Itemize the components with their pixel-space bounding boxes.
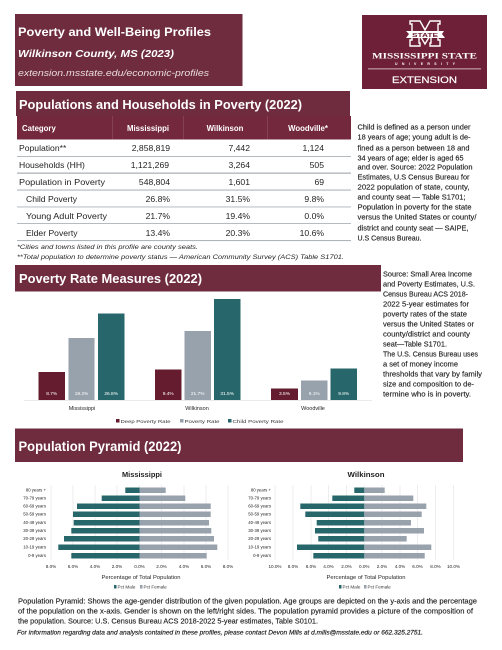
- heading: populations and households: [16, 91, 350, 116]
- county subtitle: Wilkinson County, MS (2023): [18, 48, 175, 60]
- axis ticks: 0.0%: [134, 564, 145, 569]
- axis ticks: 2.0%: [156, 564, 167, 569]
- group: Wilkinson: 9.4%: [163, 391, 174, 397]
- age labels: [23, 488, 46, 558]
- contact line: For information regarding data and analysis contained in these profiles, please contact Devon Mills at d.mills@msstate.edu or 662.325.2751.: [17, 630, 423, 636]
- legend: Pct Female: [368, 584, 391, 590]
- title: Poverty and Well-Being Profiles: [18, 25, 211, 39]
- row: population in poverty: 1,601: [228, 177, 250, 187]
- row: population: Population**: [19, 143, 67, 153]
- axis ticks: 8.0%: [288, 564, 298, 569]
- sidebar note: definitions: Estimates, U.S Census Bureau for: [358, 172, 470, 182]
- logo: Mississippi State University Extension: UNIVERSITY: [395, 62, 456, 66]
- heading: poverty rate measures: Poverty Rate Measures (2022): [19, 271, 202, 286]
- legend: Pct Male: [118, 584, 136, 590]
- age labels: 70-79 years: [23, 496, 46, 500]
- group: Woodville: 3.5%: [279, 391, 291, 397]
- group: Mississippi: 26.8%: [104, 391, 119, 397]
- group: Woodville: 9.8%: [338, 391, 350, 397]
- row: population: 7,442: [228, 143, 250, 153]
- row: child poverty: 9.8%: [304, 194, 324, 204]
- logo: Mississippi State University Extension: EXTENSION: [392, 75, 457, 86]
- male bars: [297, 488, 364, 558]
- sidebar note: poverty sources: Source: Small Area Income: [383, 270, 472, 278]
- heading: poverty rate measures: [15, 265, 381, 292]
- group: Wilkinson: 21.7%: [191, 391, 205, 397]
- bar chart: poverty rate measures: [24, 299, 372, 424]
- table header: [17, 116, 351, 140]
- table header: Mississippi: [127, 124, 169, 133]
- chart: Wilkinson pyramid: Percentage of Total Population: [326, 575, 406, 581]
- row: households: [19, 160, 324, 170]
- row: population: [19, 143, 324, 153]
- axis ticks: 2.0%: [112, 564, 122, 569]
- table footnotes: [17, 244, 344, 261]
- axis ticks: 4.0%: [323, 564, 334, 569]
- axis ticks: 6.0%: [306, 564, 316, 569]
- group: Mississippi: [38, 314, 124, 412]
- table header: Woodville*: [288, 124, 329, 133]
- group: Wilkinson: [155, 299, 240, 412]
- chart: Wilkinson pyramid: [248, 470, 460, 590]
- pyramid description: Population Pyramid: Shows the age-gender distribution of the given population. Age groups are depicted on the y-axis and the percentage: [18, 596, 477, 606]
- age labels: 30-39 years: [248, 528, 271, 533]
- sidebar note: poverty sources: Census Bureau ACS 2018-: [383, 290, 468, 298]
- legend: Deep Poverty Rate: [120, 419, 171, 424]
- sidebar note: definitions: Population in poverty for the state: [358, 202, 472, 212]
- axis ticks: 4.0%: [179, 564, 189, 569]
- age labels: 20-29 years: [23, 536, 46, 541]
- pyramid description: of the population on the x-axis. Gender is shown on the left/right sides. The population pyramid provides a picture of the composition of: [18, 606, 474, 616]
- heading: population pyramid: Population Pyramid (2022): [18, 439, 182, 454]
- age labels: 50-59 years: [23, 512, 46, 516]
- axis ticks: 2.0%: [377, 564, 387, 569]
- pyramid description: the population. Source: U.S. Census Bureau ACS 2018-2022 5-year estimates, Table S0101.: [18, 616, 318, 626]
- sidebar note: poverty sources: thresholds that vary by family: [383, 370, 482, 378]
- row: child poverty: 31.5%: [226, 194, 250, 204]
- axis ticks: 8.0%: [46, 564, 56, 569]
- axis ticks: 6.0%: [68, 564, 78, 569]
- table: populations and households: [17, 116, 351, 241]
- legend: Poverty Rate: [184, 419, 220, 424]
- icon: block M: [410, 21, 440, 46]
- age labels: 30-39 years: [23, 528, 46, 533]
- row: population: 1,124: [302, 143, 324, 153]
- sidebar note: poverty sources: county/district and county: [383, 330, 470, 338]
- row: population in poverty: Population in Poverty: [19, 177, 106, 187]
- sidebar note: poverty sources: termine who is in poverty.: [383, 390, 471, 398]
- age labels: 60-69 years: [248, 504, 271, 508]
- row: child poverty: 26.8%: [146, 194, 170, 204]
- axis ticks: [46, 564, 233, 569]
- chart: Mississippi pyramid: Mississippi: [122, 470, 162, 479]
- row: elder poverty: 13.4%: [146, 228, 170, 238]
- age labels: 20-29 years: [248, 536, 271, 541]
- legend: Child Poverty Rate: [232, 419, 284, 424]
- legend: [114, 584, 167, 590]
- axis ticks: 4.0%: [395, 564, 405, 569]
- row: young adult poverty: 21.7%: [146, 211, 170, 221]
- axis ticks: 4.0%: [90, 564, 100, 569]
- legend: [339, 584, 391, 590]
- website: extension.msstate.edu/economic-profiles: [18, 68, 209, 79]
- sidebar note: poverty sources: a set of money income: [383, 360, 458, 368]
- logo: Mississippi State University Extension: [362, 15, 487, 89]
- axis ticks: 2.0%: [341, 564, 352, 569]
- axis ticks: 8.0%: [223, 564, 233, 569]
- heading: populations and households: Populations and Households in Poverty (2022): [19, 97, 302, 112]
- row: elder poverty: 20.3%: [226, 228, 250, 238]
- sidebar note: poverty sources: 2022 5-year estimates for: [383, 300, 469, 308]
- axis ticks: [268, 564, 460, 569]
- legend: Pct Male: [342, 584, 361, 590]
- age labels: 40-49 years: [23, 520, 46, 525]
- sidebar note: definitions: fined as a person between 18 and: [358, 144, 470, 152]
- row: elder poverty: 10.6%: [300, 228, 324, 238]
- legend: Pct Female: [144, 584, 167, 590]
- logo: Mississippi State University Extension: MISSISSIPPI STATE: [372, 50, 477, 60]
- sidebar note: poverty sources: size and composition to de-: [383, 380, 474, 388]
- sidebar note: poverty sources: and Poverty Estimates, U.S.: [383, 280, 475, 288]
- row: young adult poverty: Young Adult Poverty: [26, 211, 108, 221]
- age labels: 60-69 years: [23, 504, 46, 508]
- group: Woodville: [271, 368, 357, 412]
- row: young adult poverty: 19.4%: [226, 211, 250, 221]
- age labels: 0-9 years: [28, 553, 46, 558]
- age labels: 80 years +: [26, 488, 46, 492]
- pyramid description: [18, 596, 477, 626]
- table footnotes: **Total population to determine poverty status — American Community Survey (ACS) Table S1701.: [17, 254, 344, 261]
- group: Wilkinson: 31.5%: [220, 391, 235, 397]
- header panel: [15, 14, 242, 86]
- axis ticks: 10.0%: [447, 564, 460, 569]
- row: child poverty: Child Poverty: [26, 194, 78, 204]
- sidebar note: poverty sources: seat—Table S1701.: [383, 340, 447, 348]
- axis ticks: 0.0%: [359, 564, 370, 569]
- row: elder poverty: [26, 228, 324, 238]
- row: young adult poverty: [26, 211, 324, 221]
- sidebar note: definitions: and county seat — Table S1701;: [358, 192, 466, 202]
- sidebar note: definitions: 34 years of age; elder is aged 65: [358, 154, 464, 162]
- group: Mississippi: 8.7%: [46, 391, 58, 397]
- sidebar note: poverty sources: The U.S. Census Bureau uses: [383, 350, 478, 358]
- sidebar note: poverty sources: [383, 270, 482, 398]
- sidebar note: definitions: U.S Census Bureau.: [358, 234, 422, 242]
- female bars: [140, 488, 217, 558]
- row: population in poverty: 69: [314, 177, 324, 187]
- age labels: 80 years +: [251, 488, 271, 492]
- row: child poverty: [26, 194, 324, 204]
- axis ticks: 10.0%: [268, 564, 282, 569]
- male bars: [58, 488, 139, 558]
- group: Woodville: 6.1%: [309, 391, 320, 397]
- age labels: 40-49 years: [248, 520, 271, 525]
- sidebar note: definitions: [358, 122, 477, 242]
- table footnotes: *Cities and towns listed in this profile are county seats.: [17, 244, 198, 251]
- axis ticks: 6.0%: [412, 564, 423, 569]
- row: households: 505: [310, 160, 324, 170]
- sidebar note: definitions: versus the United States or county/: [358, 212, 477, 222]
- sidebar note: definitions: Child is defined as a person under: [358, 122, 471, 132]
- group: Mississippi: 19.2%: [75, 391, 89, 397]
- group: Mississippi: Mississippi: [69, 406, 95, 412]
- group: Wilkinson: Wilkinson: [185, 406, 209, 412]
- age labels: 70-79 years: [248, 496, 271, 500]
- age labels: 10-19 years: [23, 544, 46, 550]
- sidebar note: definitions: 18 years of age; young adult is de-: [358, 132, 471, 142]
- icon: state banner: STATE: [412, 33, 438, 39]
- table header: Category: [22, 124, 56, 133]
- sidebar note: poverty sources: poverty rates of the state: [383, 310, 467, 318]
- legend: [116, 419, 284, 424]
- sidebar note: definitions: district and county seat — SAIPE,: [358, 224, 468, 232]
- row: young adult poverty: 0.0%: [304, 211, 324, 221]
- row: households: Households (HH): [19, 160, 85, 170]
- sidebar note: definitions: 2022 population of state, county,: [358, 182, 470, 192]
- row: population in poverty: 548,804: [139, 177, 170, 187]
- axis ticks: 8.0%: [430, 564, 441, 569]
- table header: Wilkinson: [207, 124, 244, 133]
- heading: population pyramid: [15, 428, 463, 462]
- row: households: 1,121,269: [131, 160, 169, 170]
- row: population in poverty: [19, 177, 324, 187]
- chart: Mississippi pyramid: Percentage of Total Population: [102, 575, 181, 581]
- row: elder poverty: Elder Poverty: [26, 228, 78, 238]
- chart: Wilkinson pyramid: Wilkinson: [348, 470, 385, 479]
- female bars: [364, 488, 431, 558]
- chart: Mississippi pyramid: [23, 470, 233, 590]
- row: population: 2,858,819: [132, 143, 170, 153]
- age labels: 0-9 years: [253, 553, 271, 558]
- age labels: 50-59 years: [248, 512, 271, 516]
- sidebar note: poverty sources: versus the United States or: [383, 320, 474, 328]
- group: Woodville: Woodville: [301, 406, 325, 412]
- row: households: 3,264: [228, 160, 250, 170]
- sidebar note: definitions: and over. Source: 2022 Population: [358, 162, 472, 172]
- axis ticks: 6.0%: [201, 564, 211, 569]
- age labels: 10-19 years: [248, 544, 271, 550]
- age labels: [248, 488, 271, 558]
